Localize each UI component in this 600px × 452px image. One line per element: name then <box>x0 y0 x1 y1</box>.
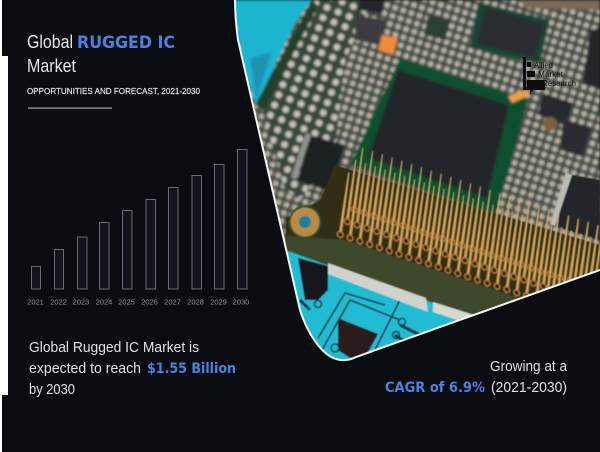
white connector <box>328 263 428 312</box>
CAGR callout: (2021-2030) <box>491 379 567 396</box>
logo: Allied Market Research: Allied <box>534 60 553 70</box>
market size callout: by 2030 <box>29 381 75 398</box>
photo white outline <box>235 0 600 360</box>
bar chart: 2023 <box>73 298 89 306</box>
bar chart: 2029 <box>210 298 227 306</box>
logo: Allied Market Research: Research <box>542 78 576 88</box>
bar chart: 2027 <box>164 298 181 306</box>
logo: Allied Market Research <box>523 57 576 95</box>
bar chart: 2025 <box>118 298 135 306</box>
title: Global <box>27 32 73 52</box>
circuit board photo <box>236 0 600 360</box>
market size callout <box>29 339 236 398</box>
CAGR callout <box>385 358 568 396</box>
out of focus board area <box>236 0 600 270</box>
title: RUGGED IC <box>77 33 175 53</box>
bar chart: 2021 <box>27 298 44 306</box>
logo: Allied Market Research: Market <box>538 69 564 79</box>
subtitle: OPPORTUNITIES AND FORECAST, 2021-2030 <box>27 86 200 96</box>
bar chart <box>27 150 249 306</box>
bar chart: 2026 <box>141 298 158 306</box>
gold pins <box>336 147 600 298</box>
copper mounting ring <box>288 206 322 238</box>
title rule <box>28 108 112 109</box>
title <box>27 32 175 76</box>
sharp lower board <box>284 147 600 360</box>
cyan traces panel <box>287 250 474 360</box>
CAGR callout: CAGR of 6.9% <box>385 380 485 396</box>
bar chart: 2030 <box>233 298 249 306</box>
title: Market <box>27 56 76 76</box>
market size callout: $1.55 Billion <box>147 361 236 377</box>
bar chart: 2024 <box>96 298 112 306</box>
market size callout: Global Rugged IC Market is <box>29 339 199 356</box>
bar chart: 2028 <box>187 298 204 306</box>
green strip <box>285 236 525 316</box>
bar chart: 2022 <box>50 298 67 306</box>
market size callout: expected to reach <box>29 360 141 377</box>
CAGR callout: Growing at a <box>490 358 568 375</box>
left white strip <box>0 0 8 452</box>
